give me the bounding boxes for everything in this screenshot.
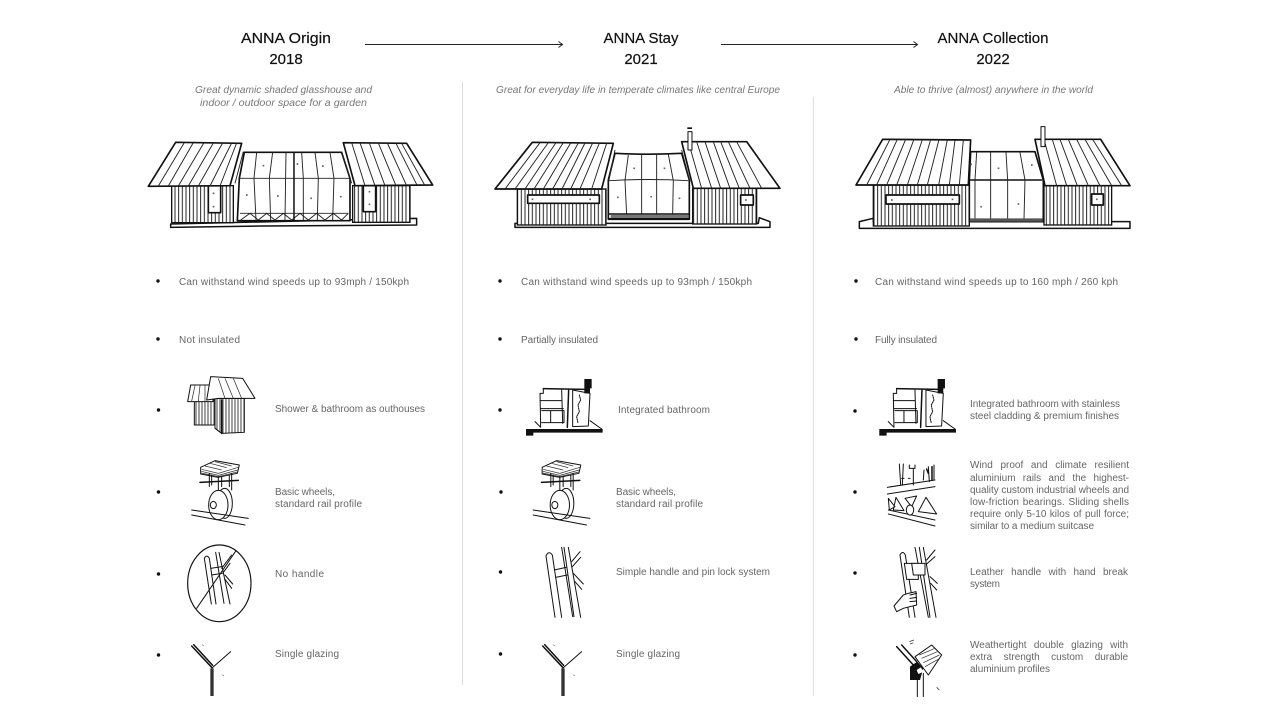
bullet bbox=[853, 409, 857, 413]
house drawing: Origin bbox=[148, 142, 433, 227]
tagline: Origin: indoor / outdoor space for a garden bbox=[200, 97, 367, 109]
feature text: bathroom: steel cladding & premium finishes bbox=[970, 411, 1119, 422]
feature text: bathroom: Shower & bathroom as outhouses bbox=[275, 404, 425, 415]
feature text: glazing bbox=[970, 640, 1128, 675]
feature text: glazing: aluminium profiles bbox=[970, 664, 1050, 675]
column: Collection bbox=[853, 277, 1129, 697]
icon: simple handle bbox=[546, 547, 583, 617]
feature text: glazing: Single glazing bbox=[616, 649, 680, 660]
icon: aluminium rails and wheels bbox=[887, 464, 937, 526]
feature: insulation: Fully insulated bbox=[875, 335, 937, 346]
bullet bbox=[499, 490, 503, 494]
icon: basic wheel bbox=[192, 461, 248, 525]
bullet bbox=[157, 653, 160, 657]
tagline: Collection: Able to thrive (almost) anywhere in the world bbox=[893, 84, 1094, 96]
icon: leather handle with hand bbox=[894, 547, 937, 617]
feature text: rails and wheels: aluminium rails and the highest- bbox=[970, 473, 1129, 484]
feature text: wheels: Basic wheels, bbox=[275, 487, 335, 498]
bullet bbox=[498, 408, 502, 412]
feature text: glazing: Single glazing bbox=[275, 649, 339, 660]
bullet bbox=[853, 653, 857, 657]
column: Stay bbox=[498, 277, 770, 696]
feature: insulation: Not insulated bbox=[179, 335, 240, 346]
title: ANNA Stay 2021: 2021 bbox=[624, 51, 658, 68]
feature text: wheels: standard rail profile bbox=[275, 499, 362, 510]
bullet bbox=[853, 490, 857, 494]
bullet bbox=[499, 570, 502, 574]
feature text: glazing: extra strength custom durable bbox=[970, 652, 1128, 663]
feature: wind resistance: Can withstand wind speeds up to 93mph / 150kph bbox=[179, 277, 409, 288]
tagline: Origin bbox=[195, 84, 373, 109]
icon: basic wheel bbox=[533, 461, 590, 525]
tagline: Origin: Great dynamic shaded glasshouse and bbox=[195, 84, 373, 96]
column divider: right bbox=[812, 97, 814, 696]
feature text: rails and wheels bbox=[970, 460, 1129, 532]
feature text: rails and wheels: low-friction bearings. Sliding shells bbox=[970, 497, 1129, 508]
icon: double glazing profile bbox=[897, 640, 942, 697]
feature text: handle: Leather handle with hand break bbox=[970, 567, 1129, 578]
tagline: Stay: Great for everyday life in temperate climates like central Europe bbox=[496, 84, 780, 96]
icon: integrated bathroom bbox=[879, 379, 956, 436]
feature: wind resistance: Can withstand wind speeds up to 160 mph / 260 kph bbox=[875, 277, 1118, 288]
arrow: Stay to Collection bbox=[721, 42, 918, 48]
feature text: rails and wheels: similar to a medium suitcase bbox=[970, 521, 1094, 532]
arrow: Origin to Stay bbox=[365, 42, 562, 48]
icon: integrated bathroom bbox=[526, 379, 603, 436]
feature text: rails and wheels: Wind proof and climate resilient bbox=[970, 460, 1129, 471]
bullet bbox=[157, 408, 160, 412]
icon: single glazing bbox=[192, 645, 231, 696]
bullet bbox=[853, 571, 857, 575]
house drawing: Stay bbox=[495, 127, 780, 227]
bullet bbox=[157, 490, 160, 494]
icon: outhouses bbox=[188, 377, 255, 433]
icon: single glazing bbox=[543, 645, 582, 696]
column: Origin bbox=[156, 277, 425, 696]
feature text: handle: No handle bbox=[275, 569, 324, 580]
title: ANNA Collection 2022 bbox=[938, 30, 1048, 68]
feature text: rails and wheels: require only 5-10 kilos of pull force; bbox=[970, 509, 1129, 520]
title: ANNA Origin 2018: 2018 bbox=[269, 51, 303, 68]
feature text: bathroom: Integrated bathroom bbox=[618, 405, 710, 416]
feature text: handle: system bbox=[970, 579, 1000, 590]
feature text: bathroom: Integrated bathroom with stainless bbox=[970, 399, 1120, 410]
feature: insulation: Partially insulated bbox=[521, 335, 598, 346]
feature text: handle bbox=[970, 567, 1129, 590]
title: ANNA Collection 2022: ANNA Collection bbox=[938, 30, 1048, 47]
feature text: glazing: Weathertight double glazing with bbox=[970, 640, 1128, 651]
house drawing: Collection bbox=[856, 127, 1130, 228]
bullet bbox=[499, 652, 502, 656]
icon: no handle bbox=[188, 545, 251, 622]
feature text: wheels: Basic wheels, bbox=[616, 487, 676, 498]
feature text: wheels: standard rail profile bbox=[616, 499, 703, 510]
bullet bbox=[157, 572, 160, 576]
feature: wind resistance: Can withstand wind speeds up to 93mph / 150kph bbox=[521, 277, 752, 288]
title: ANNA Collection 2022: 2022 bbox=[976, 51, 1010, 68]
feature text: rails and wheels: quality custom industrial wheels and bbox=[970, 485, 1129, 496]
feature text: handle: Simple handle and pin lock system bbox=[616, 567, 770, 578]
title: ANNA Stay 2021 bbox=[603, 30, 679, 68]
feature text: wheels bbox=[275, 487, 362, 510]
title: ANNA Origin 2018 bbox=[241, 30, 331, 68]
title: ANNA Stay 2021: ANNA Stay bbox=[603, 30, 679, 47]
feature text: wheels bbox=[616, 487, 703, 510]
column divider: left bbox=[462, 82, 464, 685]
title: ANNA Origin 2018: ANNA Origin bbox=[241, 30, 331, 47]
feature text: bathroom bbox=[970, 399, 1120, 422]
